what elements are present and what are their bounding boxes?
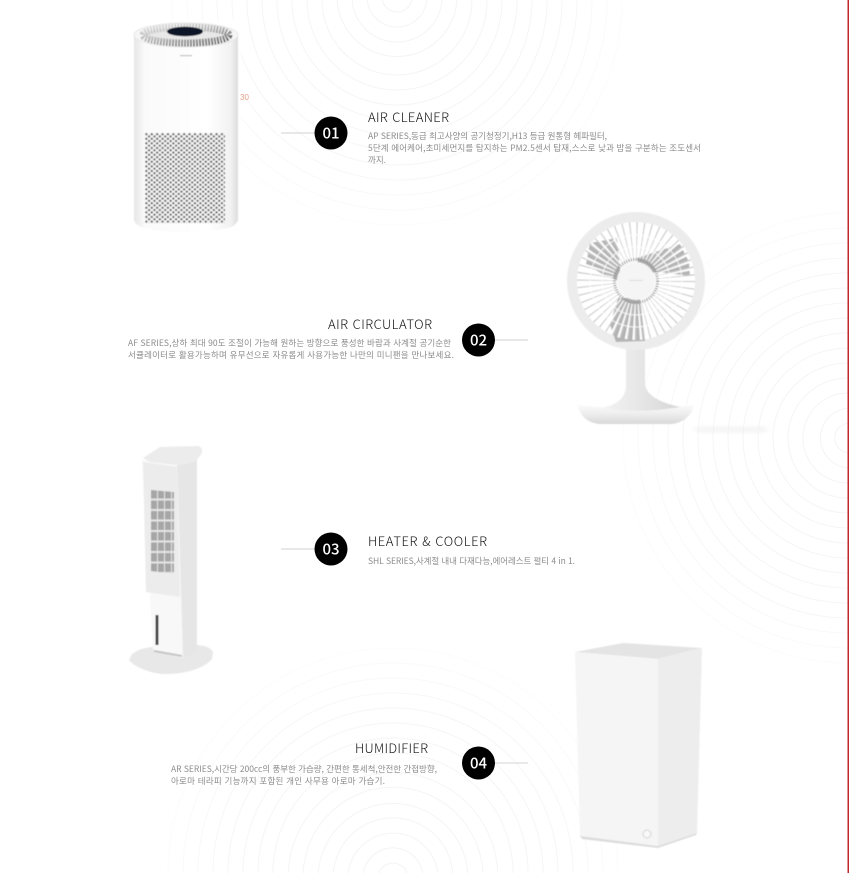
concentric rings: right [623,213,848,663]
description: air cleaner: 5단계 에어케어,초미세먼지를 탐지하는 PM2.5센서 탑재,스스로 낮과 밤을 구분하는 조도센서 [368,142,701,154]
tower base [129,645,213,674]
product: air circulator fan [572,217,700,424]
description: air circulator: 서큘레이터로 활용가능하며 유무선으로 자유롭게 사용가능한 나만의 미니팬을 만나보세요. [128,349,454,361]
connector 01 [281,132,315,134]
heading: heater and cooler: HEATER & COOLER [368,531,487,550]
connector 03 [281,548,315,550]
description: humidifier [171,763,437,787]
heading: air circulator: AIR CIRCULATOR [328,314,432,333]
concentric rings: bottom [168,648,618,873]
description: air cleaner [368,130,701,166]
connector 02 [495,340,528,341]
number badge 03: 03 [322,538,340,560]
concentric rings: top [172,0,622,225]
fan base [577,405,694,424]
description: air circulator [128,337,454,361]
fan floor shadow [695,428,767,431]
number badge 04 [462,746,495,780]
connector 04 [495,762,528,764]
number badge 02 [462,324,495,356]
number badge 02: 02 [470,330,487,350]
number badge 04: 04 [470,752,487,774]
heading: air cleaner: AIR CLEANER [368,107,449,126]
description: heater and cooler: SHL SERIES,사계절 내내 다재다능,에어레스트 펄티 4 in 1. [368,555,575,567]
description: humidifier: AR SERIES,시간당 200cc의 풍부한 가습량, 간편한 통세척,안전한 간접방향, [171,763,437,775]
product: heater and cooler tower [129,446,213,674]
description: air cleaner: AP SERIES,동급 최고사양의 공기청정기,H13 등급 원통형 헤파필터, [368,130,607,142]
right edge red line [848,0,849,873]
number badge 01 [314,116,348,150]
number badge 01: 01 [322,122,340,144]
product: humidifier [575,643,702,848]
description: air circulator: AF SERIES,상하 최대 90도 조절이 가능해 원하는 방향으로 풍성한 바람과 사계절 공기순한 [128,337,451,349]
number badge 03 [314,532,348,566]
description: humidifier: 아로마 테라피 기능까지 포함된 개인 사무용 아로마 가습기. [171,775,385,787]
heading: humidifier: HUMIDIFIER [355,738,428,757]
small label 30: 30 [240,93,249,102]
description: air cleaner: 까지. [368,154,386,166]
product: air cleaner [128,20,241,234]
